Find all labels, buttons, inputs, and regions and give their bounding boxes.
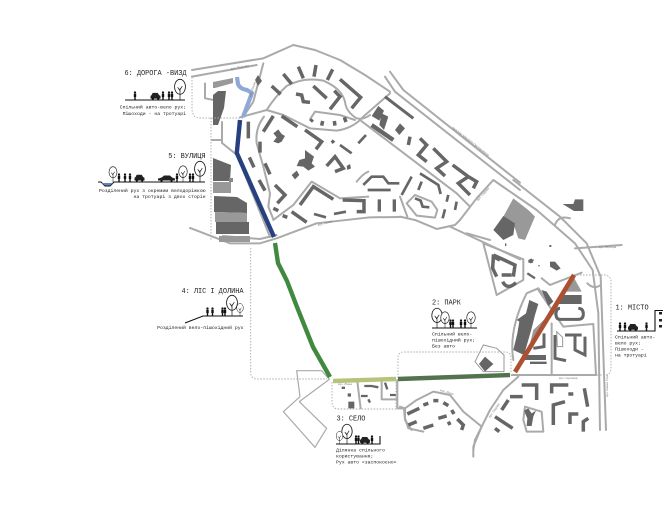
callout 2: park: Без авто (432, 344, 455, 350)
route 6: road-exit (237, 77, 252, 117)
callout 5: street: на тротуарі з двох сторін (134, 194, 206, 200)
road name labels: проспект Михайла Омеляновича (451, 126, 490, 157)
road name labels: вул. Польова (230, 63, 250, 71)
callout 2: park (432, 300, 477, 350)
callout 5: street: 5: ВУЛИЦЯ (168, 153, 206, 161)
dashed study boundaries (192, 77, 611, 409)
callout 2: park: 2: ПАРК (432, 300, 461, 308)
callout 4: forest and valley: Розділений вело-пішохідний рух (157, 324, 244, 331)
callout 3: village: 3: СЕЛО (336, 416, 365, 424)
callout 2: park: Спільний вело- (432, 330, 472, 338)
callout 1: city (615, 304, 663, 358)
building block: east retail (493, 198, 583, 278)
callout 5: street (98, 153, 206, 200)
callout 3: village (336, 416, 397, 466)
callout 6: road-exit: Пішоходи - на тротуарі (123, 111, 186, 117)
road name labels: вул. Лісова (317, 219, 333, 227)
section diagram 6 (125, 79, 185, 100)
map: buildings (213, 65, 588, 432)
callout 4: forest and valley: 4: ЛІС І ДОЛИНА (181, 288, 244, 296)
route 1: city (515, 275, 574, 372)
callout 4: forest and valley (157, 288, 244, 331)
route 2: park (398, 375, 510, 379)
callout 1: city: 1: МІСТО (616, 304, 649, 312)
road name labels: вул. Лісна (440, 388, 454, 396)
section diagram 1 (617, 310, 663, 331)
road name labels: вул. Садова (488, 402, 501, 419)
callout 2: park: пішохідний рух; (432, 336, 475, 344)
callout 6: road-exit: Спільний авто-вело рух; (120, 104, 186, 110)
road name labels: вул. Лісова (248, 81, 257, 97)
callout 1: city: Пішоходи - (615, 346, 644, 352)
road name labels: вул. Садова (476, 186, 490, 202)
callout 1: city: Спільний авто- (615, 334, 655, 340)
callout 6: road-exit: 6: ДОРОГА -ВИЗД (124, 70, 187, 78)
road name labels: вул. Серпова (559, 376, 578, 380)
route 3: village (333, 379, 396, 381)
road name labels: вул. Вінтера (599, 245, 616, 249)
route 4: forest and valley (275, 243, 330, 377)
road name labels (230, 63, 616, 419)
section diagram 2 (432, 308, 477, 328)
callout 6: road-exit (120, 70, 187, 117)
callout 5: street: Розділений рух з окремим велодоріжкою (99, 187, 206, 194)
callout 3: village: Ділянка спільного (336, 448, 385, 454)
callout 1: city: вело рух; (615, 342, 641, 346)
road name labels: вул. Лісна (338, 382, 352, 386)
map: road network (190, 45, 622, 457)
section diagram 4 (185, 295, 243, 323)
callout 3: village: користування; (336, 454, 373, 460)
building block: west side (213, 75, 262, 242)
section diagram 3 (336, 424, 380, 444)
section diagram 5 (98, 161, 205, 186)
callout 3: village: Рух авто «заспокоєно» (336, 460, 397, 466)
callout 1: city: на тротуарі (615, 352, 647, 358)
route 5: street (237, 120, 274, 237)
road name labels: вул. Княжа Гора (605, 374, 609, 397)
